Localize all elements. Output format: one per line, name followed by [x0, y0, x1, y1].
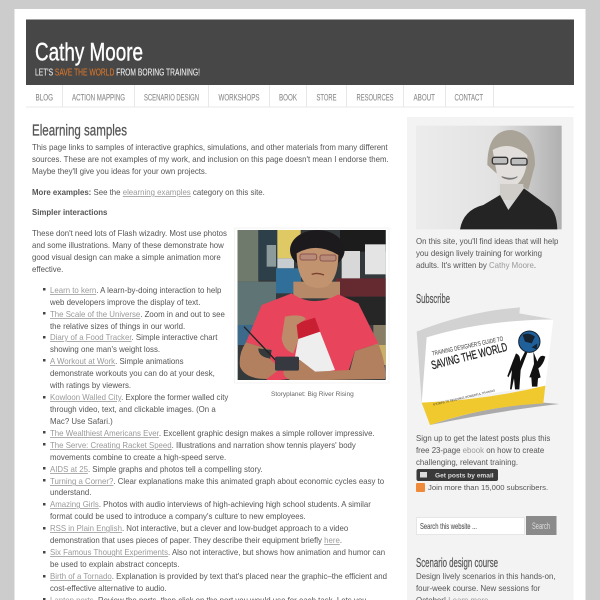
- button: get posts by email: Get posts by email: [435, 472, 494, 480]
- list of samples: Learn to kern. A learn-by-doing interaction to help: [50, 286, 222, 295]
- list of samples: Six Famous Thought Experiments. Also not interactive, but shows how animation and humor can: [50, 548, 385, 557]
- book cover illustration: SAVING THE WORLD: [430, 340, 509, 372]
- simpler interactions paragraph: and some illustrations. Many of these demonstrate how: [32, 241, 224, 250]
- list of samples: cost-effective alternative to audio.: [50, 584, 167, 593]
- list of samples: demonstrate workouts you can do at your desk,: [50, 369, 215, 378]
- sidebar intro text: adults. It's written by Cathy Moore.: [416, 261, 536, 270]
- list of samples: format could be used to introduce a company's culture to new employees.: [50, 512, 306, 521]
- subscribe text: [416, 434, 550, 467]
- photo: Big River Rising: [234, 228, 389, 383]
- list of samples: Turning a Corner?. Clear explanations make this animated graph about economic cycles easy to: [50, 477, 385, 486]
- photo caption: Storyplanet: Big River Rising: [271, 391, 354, 398]
- simpler interactions paragraph: effective.: [32, 265, 63, 274]
- sidebar intro text: On this site, you'll find ideas that will help: [416, 237, 559, 246]
- list of samples: through video, text, and clickable images. (On a: [50, 405, 216, 414]
- list of samples: demonstration that uses pieces of paper. They describe their equipment briefly here.: [50, 536, 342, 545]
- portrait of Cathy Moore: [416, 126, 562, 229]
- intro paragraph: [32, 143, 389, 176]
- navigation bar: [26, 85, 574, 108]
- list of samples: Amazing Girls. Photos with audio interviews of high-achieving high school students. A similar: [50, 500, 371, 509]
- list of samples: The Wealthiest Americans Ever. Excellent graphic design makes a simple rollover impressive.: [50, 429, 375, 438]
- book cover illustration: [417, 307, 559, 425]
- subscribe text: free 23-page ebook on how to create: [416, 446, 545, 455]
- heading: subscribe: Subscribe: [416, 291, 450, 306]
- sidebar intro text: [416, 237, 559, 270]
- more examples line: More examples: See the elearning examples category on this site.: [32, 188, 265, 197]
- list of samples: with ratings by viewers.: [49, 381, 131, 390]
- header banner: [26, 20, 574, 85]
- list of samples: The Serve: Creating Racket Speed. Illustrations and narration show tennis players' body: [50, 441, 356, 450]
- heading: scenario design course: Scenario design course: [416, 555, 498, 570]
- button: get posts by email: [416, 469, 498, 481]
- list of samples: be used to explain abstract concepts.: [50, 560, 180, 569]
- list of samples: Mac? Use Safari.): [50, 417, 113, 426]
- simpler interactions paragraph: [32, 229, 227, 274]
- simpler interactions paragraph: good visual design can make a simple animation more: [32, 253, 221, 262]
- list of samples: understand.: [50, 488, 91, 497]
- navigation bar: ABOUT: [414, 92, 435, 104]
- subheading: simpler interactions: Simpler interactions: [32, 208, 108, 217]
- navigation bar: CONTACT: [454, 92, 483, 104]
- navigation bar: WORKSHOPS: [218, 92, 260, 104]
- list of samples: the relative sizes of things in our world.: [50, 322, 185, 331]
- list of samples: The Scale of the Universe. Zoom in and out to see: [50, 310, 225, 319]
- list of samples: [43, 286, 387, 600]
- rss subscribers line: Join more than 15,000 subscribers.: [428, 483, 548, 492]
- search form: [416, 516, 556, 535]
- list of samples: Diary of a Food Tracker. Simple interactive chart: [50, 333, 218, 342]
- search form: Search: [532, 521, 550, 532]
- list of samples: Kowloon Walled City. Explore the former walled city: [50, 393, 228, 402]
- intro paragraph: Maybe they'll give you ideas for your own projects.: [32, 167, 207, 176]
- navigation bar: ACTION MAPPING: [72, 92, 125, 104]
- list of samples: AIDS at 25. Simple graphs and photos tell a compelling story.: [50, 465, 263, 474]
- simpler interactions paragraph: These don't need lots of Flash wizadry. Most use photos: [32, 229, 227, 238]
- navigation bar: BOOK: [279, 92, 297, 104]
- page heading: Elearning samples: [32, 122, 127, 140]
- list of samples: Birth of a Tornado. Explanation is provided by text that's placed near the graphic–the efficient and: [50, 572, 387, 581]
- sidebar intro text: you design lively training for working: [416, 249, 542, 258]
- navigation bar: STORE: [316, 92, 336, 104]
- navigation bar: BLOG: [36, 92, 53, 104]
- intro paragraph: This page links to samples of interactive graphics, simulations, and other materials from many different: [32, 143, 388, 152]
- sidebar panel: [407, 117, 574, 600]
- scenario course text: [416, 572, 556, 600]
- book cover illustration: 8 STEPS TO RELEVANT, POWERFUL TRAINING: [433, 388, 496, 407]
- site title: Cathy Moore: [35, 38, 143, 66]
- navigation bar: SCENARIO DESIGN: [144, 92, 199, 104]
- subscribe text: Sign up to get the latest posts plus this: [416, 434, 550, 443]
- book cover illustration: TRAINING DESIGNER'S GUIDE TO: [431, 336, 504, 358]
- scenario course text: Design lively scenarios in this hands-on,: [416, 572, 556, 581]
- list of samples: showing one man's weight loss.: [50, 345, 160, 354]
- list of samples: A Workout at Work. Simple animations: [50, 357, 184, 366]
- list of samples: web developers improve the display of text.: [49, 298, 200, 307]
- search form: Search this website ...: [420, 521, 477, 531]
- intro paragraph: sources. These are not examples of my work, and inclusion on this page doesn't mean I endorse them.: [32, 155, 389, 164]
- subscribe text: challenging, relevant training.: [416, 458, 518, 467]
- tagline: LET'S SAVE THE WORLD FROM BORING TRAINING!: [35, 66, 200, 78]
- scenario course text: four-week course. New sessions for: [416, 584, 541, 593]
- list of samples: movements combine to create a high-speed serve.: [50, 453, 226, 462]
- list of samples: RSS in Plain English. Not interactive, but a clever and low-budget approach to a video: [50, 524, 349, 533]
- navigation bar: RESOURCES: [356, 92, 394, 104]
